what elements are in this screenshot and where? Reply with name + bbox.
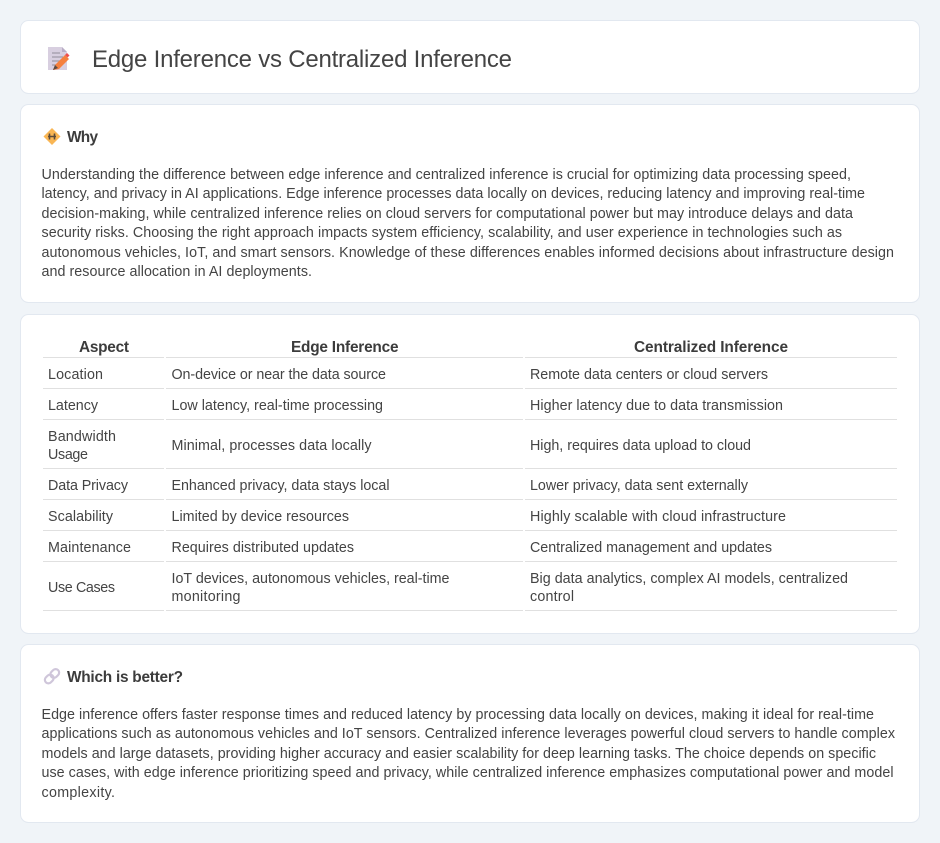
table header: Aspect [79,339,129,356]
row: use cases: Use Cases [48,580,115,596]
panel: title card [20,20,920,94]
panel: why [20,104,920,302]
text block: why paragraph: Understanding the difference between edge inference and centralized inference is crucial for optimizing data processing speed, [42,167,851,183]
row: latency [43,398,897,420]
row: bandwidth usage: Minimal, processes data locally [172,438,372,454]
row: latency: Low latency, real-time processing [172,398,383,414]
row: location: Remote data centers or cloud servers [530,367,768,383]
row: latency: Latency [48,398,99,414]
panel: which is better [20,644,920,822]
text block: which is better paragraph: use cases, with edge inference prioritizing speed and privacy, while centralized inference emphasizes computational power and model [42,765,894,781]
row: data privacy: Data Privacy [48,478,129,494]
row: location [43,367,897,388]
icon: construction diamond [44,128,60,145]
text block: why paragraph: decision-making, while centralized inference relies on cloud servers for computational power but may introduce delays and data [42,206,853,222]
text block: which is better paragraph: complexity. [42,785,115,801]
row: data privacy [43,478,897,500]
title: Edge Inference vs Centralized Inference [92,46,512,73]
text block: which is better paragraph: applications such as autonomous vehicles and IoT sensors. Centralized inference leverages powerful cloud servers to handle complex [42,726,895,742]
heading: why: Why [67,129,98,146]
row: scalability: Scalability [48,509,114,525]
text block: which is better paragraph: Edge inference offers faster response times and reduced latency by processing data locally on devices, making it ideal for real-time [42,707,874,723]
row: maintenance: Maintenance [48,540,131,556]
row: scalability: Limited by device resources [172,509,349,525]
row: use cases: control [530,589,574,605]
text block: why paragraph [42,167,894,280]
row: bandwidth usage: Bandwidth [48,429,116,445]
icon: memo with pencil [48,47,70,70]
text block: why paragraph: security risks. Choosing the right approach impacts system efficiency, scalability, and user experience in technologies such as [42,225,842,241]
row: maintenance: Centralized management and updates [530,540,772,556]
row: data privacy: Enhanced privacy, data stays local [172,478,390,494]
text block: why paragraph: autonomous vehicles, IoT, and smart sensors. Knowledge of these differences enables informed decisions about infrastructure design [42,245,894,261]
text block: why paragraph: latency, and privacy in AI applications. Edge inference processes data locally on devices, reducing latency and improving real-time [42,186,865,202]
row: use cases: monitoring [172,589,241,605]
text block: which is better paragraph: models and large datasets, providing higher accuracy and easier scalability for deep learning tasks. The choice depends on specific [42,746,876,762]
row: maintenance [43,540,897,562]
text block: why paragraph: and resource allocation in AI deployments. [42,264,312,280]
row: scalability: Highly scalable with cloud infrastructure [530,509,786,525]
text block: which is better paragraph [42,707,895,801]
row: scalability [43,509,897,530]
row: use cases [43,571,897,610]
row: location: Location [48,367,103,383]
row: latency: Higher latency due to data transmission [530,398,783,414]
icon: chain link [43,668,61,685]
row: bandwidth usage: High, requires data upload to cloud [530,438,751,454]
row: bandwidth usage [43,429,897,468]
row: bandwidth usage: Usage [48,447,88,463]
heading: which is better: Which is better? [67,669,183,686]
panel: comparison table [20,314,920,634]
table header: Edge Inference [291,339,399,356]
row: maintenance: Requires distributed updates [172,540,354,556]
row: use cases: IoT devices, autonomous vehicles, real-time [172,571,450,587]
row: location: On-device or near the data source [172,367,386,383]
table header: Centralized Inference [634,339,788,356]
table header [43,339,897,358]
row: data privacy: Lower privacy, data sent externally [530,478,749,494]
row: use cases: Big data analytics, complex AI models, centralized [530,571,848,587]
